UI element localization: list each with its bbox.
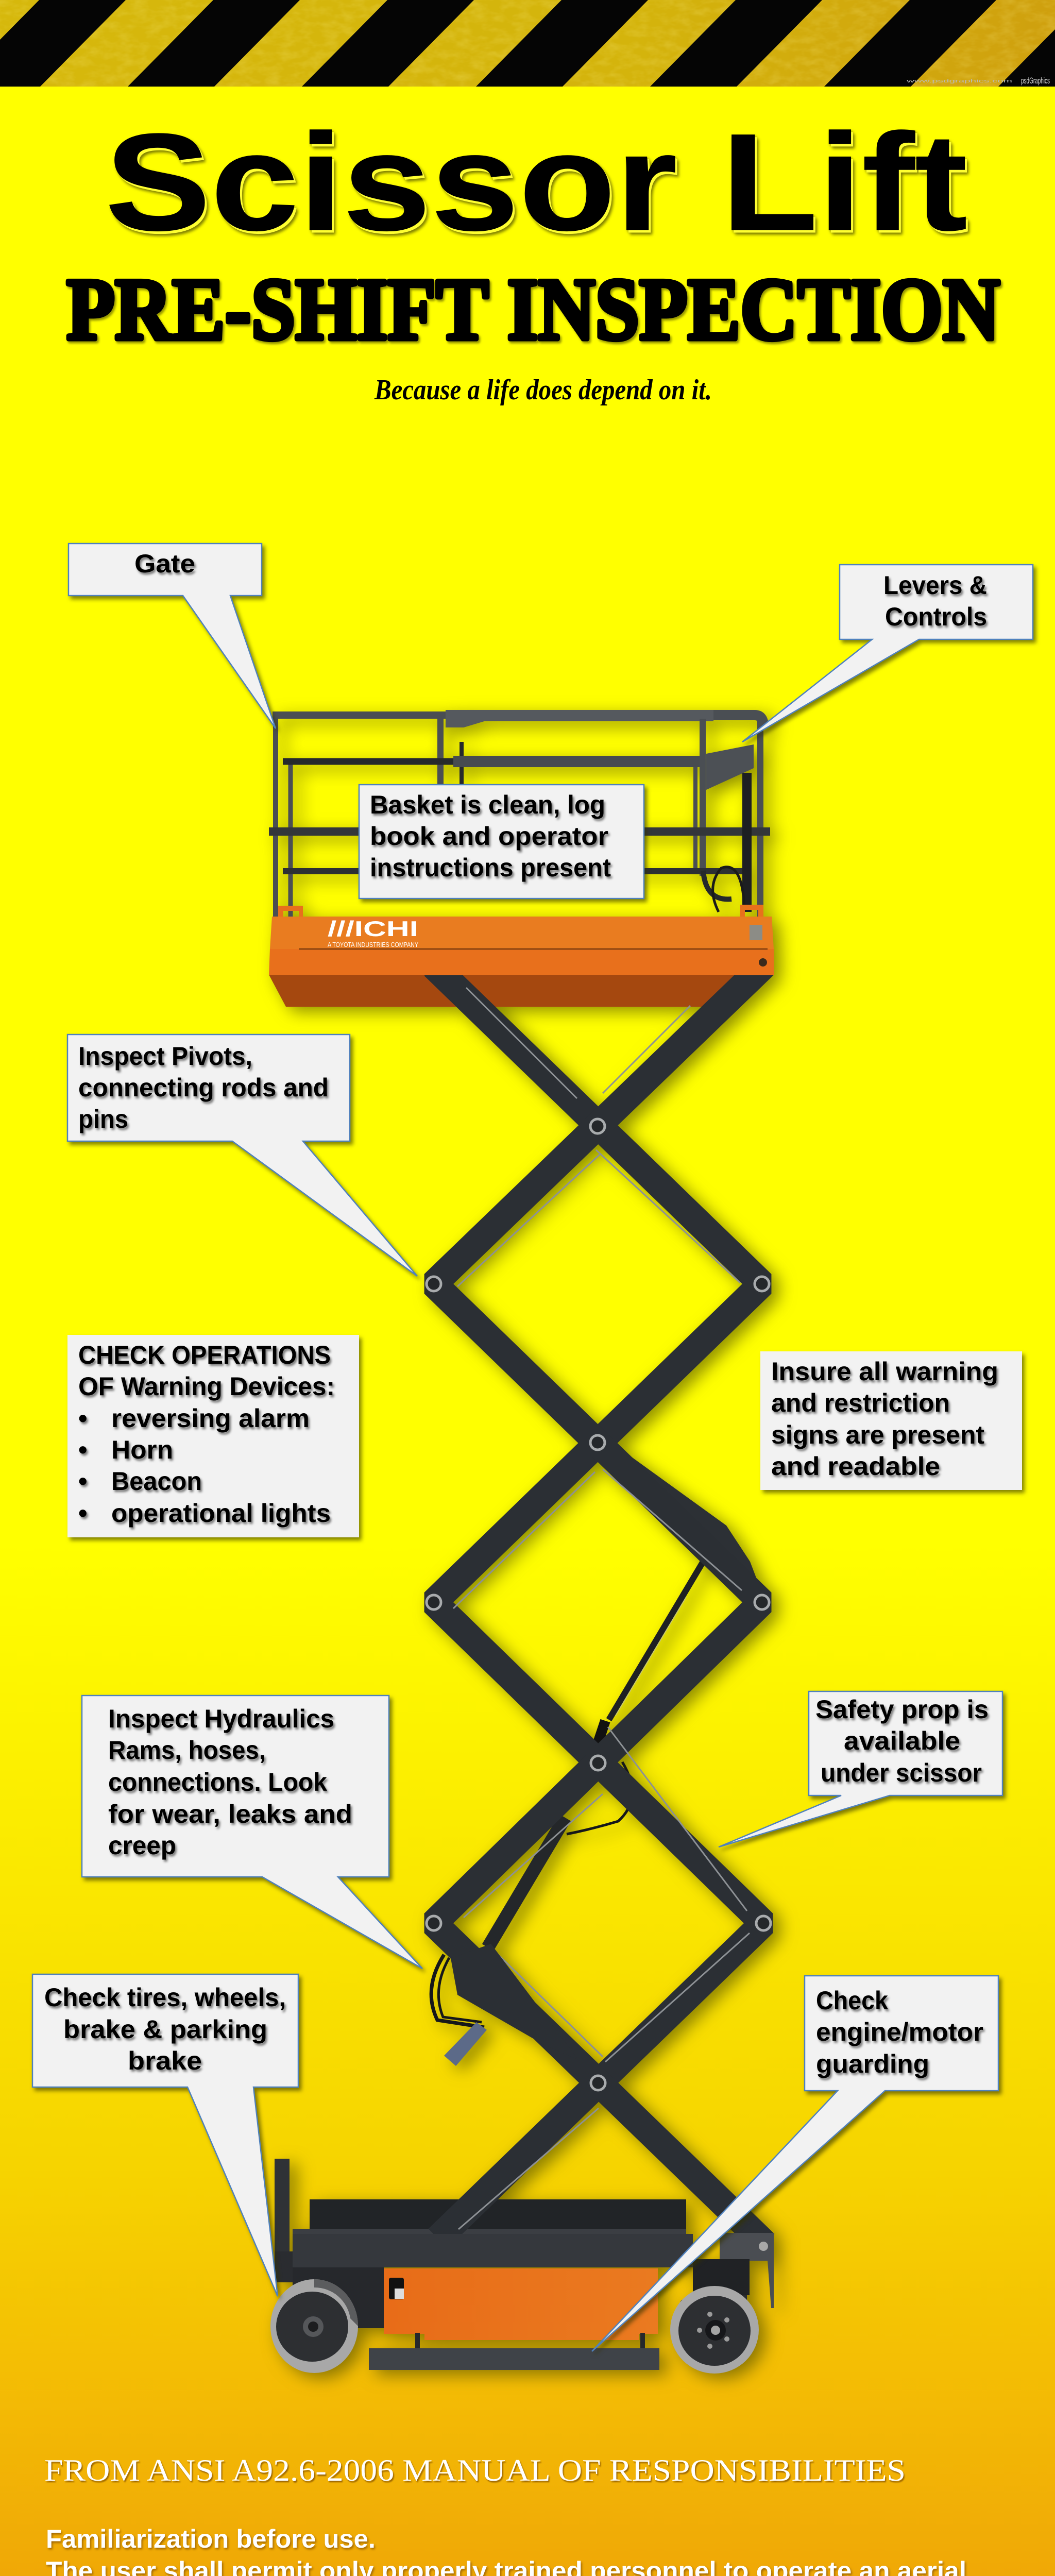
callout text: pins <box>78 1105 128 1133</box>
panel: warning and restriction signs <box>760 1351 1022 1490</box>
panel text: Beacon <box>111 1467 202 1496</box>
callout text: brake & parking <box>63 2015 267 2044</box>
panel text <box>771 1357 998 1481</box>
hydraulic ram <box>488 1453 768 1947</box>
callout text <box>883 571 987 631</box>
text block: responsibilities <box>46 2524 992 2576</box>
panel text: operational lights <box>111 1499 331 1528</box>
callout text: Safety prop is <box>815 1695 989 1724</box>
base rear deck <box>275 2159 686 2267</box>
callout shape <box>592 1976 998 2351</box>
callout text <box>370 790 611 882</box>
callout text: Inspect Pivots, <box>78 1042 252 1071</box>
callout text: instructions present <box>370 853 611 882</box>
callout text: book and operator <box>370 822 608 851</box>
callout text: Check <box>816 1986 888 2015</box>
AICHI logo: ///ICHI <box>328 917 418 941</box>
panel text: Insure all warning <box>771 1357 998 1386</box>
panel text: OF Warning Devices: <box>78 1372 335 1401</box>
panel text: • <box>78 1404 88 1433</box>
callout: levers and controls <box>742 565 1033 742</box>
illustration: scissor lift <box>269 710 774 2374</box>
panel text: reversing alarm <box>111 1404 310 1433</box>
pivot pins <box>427 1119 771 2090</box>
callout shape <box>742 565 1033 742</box>
lower hydraulic bracket and hoses <box>431 1944 578 2066</box>
callout text: guarding <box>816 2049 929 2078</box>
callout text: creep <box>108 1831 176 1860</box>
callout text: engine/motor <box>816 2018 983 2046</box>
callout: inspect hydraulics <box>82 1696 422 1969</box>
callout text: Rams, hoses, <box>108 1736 266 1765</box>
callout text: Basket is clean, log <box>370 790 605 819</box>
hazard stripe band: top <box>0 0 1055 87</box>
panel text: and restriction <box>771 1388 950 1417</box>
callout: gate <box>69 544 276 728</box>
callout text: connections. Look <box>108 1768 327 1797</box>
callout text: Check tires, wheels, <box>44 1983 286 2012</box>
callout text: Controls <box>885 602 987 631</box>
callout: inspect pivots <box>67 1035 417 1276</box>
panel text: • <box>78 1467 88 1496</box>
callout shape <box>82 1696 422 1969</box>
callout text <box>816 1986 983 2078</box>
text block: responsibilities: Familiarization before use. <box>46 2524 376 2553</box>
hazard stripe band: top: www.psdgraphics.com <box>906 78 1012 83</box>
callout: safety prop <box>719 1691 1002 1847</box>
panel text: Horn <box>111 1435 173 1464</box>
callout: engine guarding <box>592 1976 998 2351</box>
left wheel <box>270 2279 358 2373</box>
title: Scissor Lift: Scissor Lift <box>105 105 967 259</box>
control panel <box>706 744 754 790</box>
callout shape <box>359 785 644 899</box>
orange motor compartment <box>384 2268 658 2340</box>
callout text: available <box>844 1726 960 1755</box>
callout text: Inspect Hydraulics <box>108 1704 334 1733</box>
AICHI logo <box>328 917 418 948</box>
callout shape <box>69 544 276 728</box>
callout text: brake <box>128 2046 202 2075</box>
bottom guard plate <box>369 2333 659 2370</box>
heading: ANSI manual of responsibilities: FROM ANSI A92.6-2006 MANUAL OF RESPONSIBILITIES <box>44 2453 906 2487</box>
right wheel <box>670 2286 759 2374</box>
callout: tires and brakes <box>32 1974 298 2296</box>
panel box <box>760 1351 1022 1490</box>
callout text <box>108 1704 352 1860</box>
panel text: and readable <box>771 1452 940 1481</box>
callout text: connecting rods and <box>78 1073 329 1102</box>
AICHI logo: A TOYOTA INDUSTRIES COMPANY <box>328 941 418 948</box>
callout shape <box>719 1691 1002 1847</box>
callout text <box>44 1983 286 2075</box>
callout shape <box>67 1035 417 1276</box>
panel text <box>78 1341 335 1528</box>
callout text: Gate <box>134 549 195 578</box>
callout shape <box>32 1974 298 2296</box>
callout: basket <box>359 785 644 899</box>
panel box <box>67 1335 359 1537</box>
panel text: • <box>78 1499 88 1528</box>
panel text: • <box>78 1435 88 1464</box>
callout text <box>78 1042 329 1133</box>
panel: check operations of warning devices <box>67 1335 359 1537</box>
callout text: for wear, leaks and <box>108 1800 352 1828</box>
platform railing <box>269 710 770 917</box>
callout text <box>815 1695 989 1787</box>
tagline: Because a life does depend on it. <box>374 374 712 406</box>
callout text: under scissor <box>821 1758 982 1787</box>
panel text: CHECK OPERATIONS <box>78 1341 331 1369</box>
base chassis <box>275 2233 774 2328</box>
scissor arms <box>434 964 765 2244</box>
scissor arm highlights <box>453 988 750 2229</box>
callout text: Levers & <box>883 571 987 600</box>
panel text: signs are present <box>771 1420 984 1449</box>
platform body <box>269 905 774 1007</box>
